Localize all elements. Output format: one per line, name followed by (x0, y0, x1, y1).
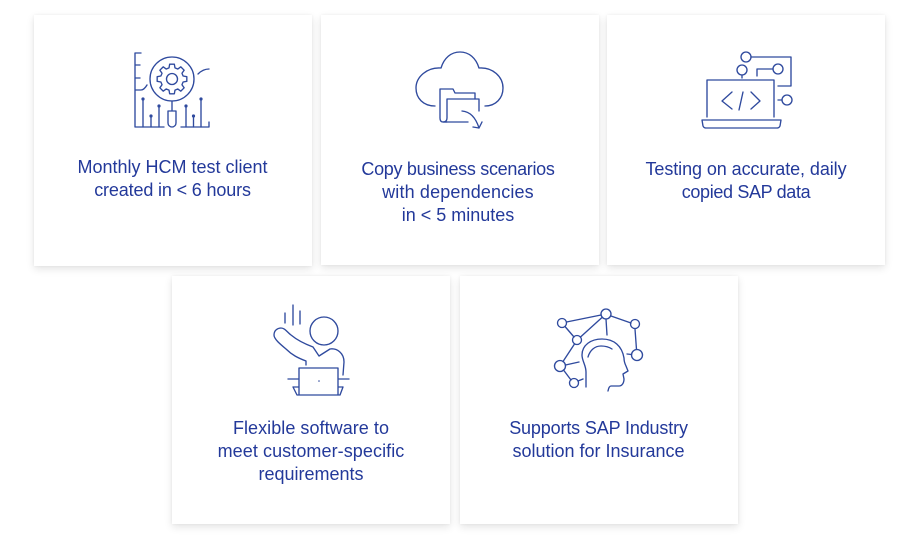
caption: monthly HCM test client: Monthly HCM test client (77, 157, 268, 177)
caption: flexible software: meet customer-specific (218, 441, 404, 461)
caption: monthly HCM test client (77, 157, 268, 200)
caption: copy business scenarios: in < 5 minutes (402, 205, 514, 225)
icon: magnifier with gear over bar chart (134, 52, 210, 128)
caption: flexible software (218, 418, 404, 484)
caption: copy business scenarios (361, 159, 555, 225)
panel: monthly HCM test client (34, 15, 312, 266)
caption: flexible software: Flexible software to (233, 418, 389, 438)
caption: SAP industry solution (509, 418, 688, 461)
icon: head with network nodes (554, 308, 644, 392)
caption: testing on accurate data: Testing on accurate, daily (645, 159, 847, 179)
caption: testing on accurate data: copied SAP data (682, 182, 810, 202)
icon: person raising hand at laptop (273, 304, 350, 396)
caption: SAP industry solution: Supports SAP Industry (509, 418, 688, 438)
caption: copy business scenarios: Copy business scenarios (361, 159, 555, 179)
panel: copy business scenarios (321, 15, 599, 265)
caption: copy business scenarios: with dependencies (382, 182, 534, 202)
caption: monthly HCM test client: created in < 6 hours (94, 180, 251, 200)
caption: flexible software: requirements (258, 464, 364, 484)
caption: testing on accurate data (645, 159, 847, 202)
icon: laptop with code and circuit nodes (701, 51, 793, 129)
panel: SAP industry solution (460, 276, 738, 524)
panel: flexible software (172, 276, 450, 524)
caption: SAP industry solution: solution for Insurance (512, 441, 685, 461)
icon: cloud with folder and arrow (415, 51, 504, 129)
panel: testing on accurate data (607, 15, 885, 265)
